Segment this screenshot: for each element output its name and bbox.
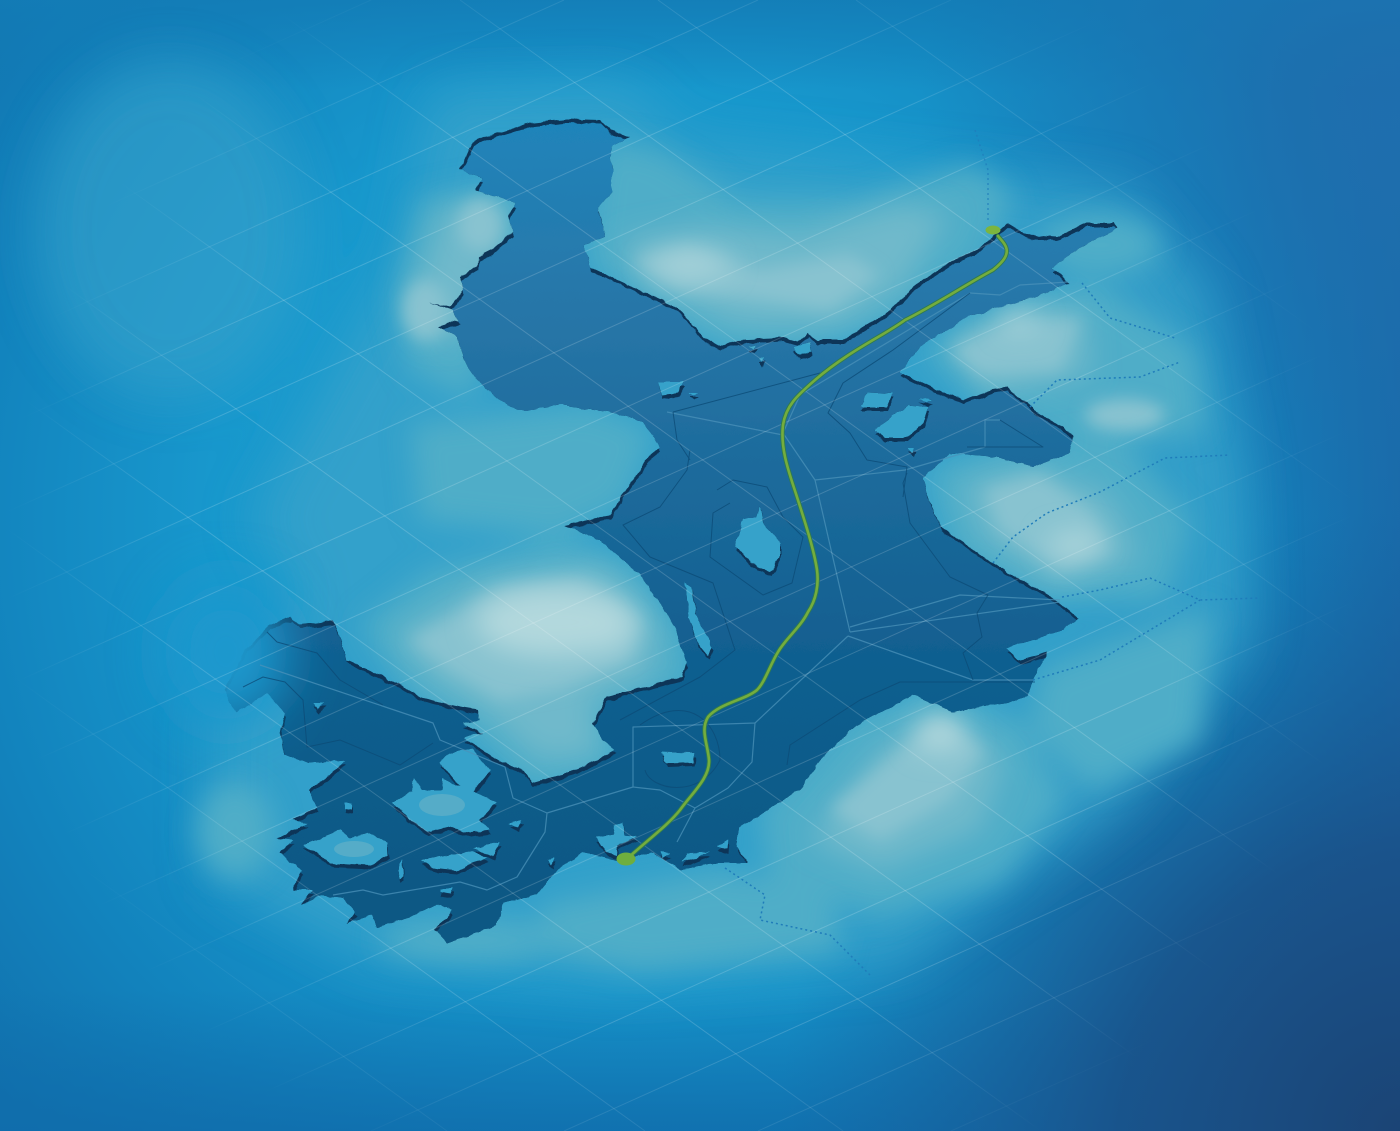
- inner lake shoals: [334, 794, 465, 857]
- shallow water: brightest shoal: [475, 255, 1103, 751]
- dotted maritime and land borders: [725, 130, 1260, 975]
- shallow water: pale centres: [403, 199, 1165, 840]
- pipeline landfall marker: south: [616, 852, 636, 866]
- regional borders: [243, 293, 1043, 788]
- road network: [260, 282, 1068, 895]
- land mass: [224, 119, 1119, 947]
- shallow water: light band: [395, 205, 1140, 870]
- pipeline route: [628, 236, 1007, 858]
- pipeline landfall marker: north: [986, 226, 1000, 234]
- western land fade: [164, 580, 288, 724]
- lake water underlay: [302, 342, 936, 878]
- coast cliff shadow: [224, 119, 1118, 943]
- shallow water: outer halo: [35, 60, 1250, 985]
- shallow water: mid tones: [197, 140, 1210, 970]
- land surface: [225, 123, 1119, 947]
